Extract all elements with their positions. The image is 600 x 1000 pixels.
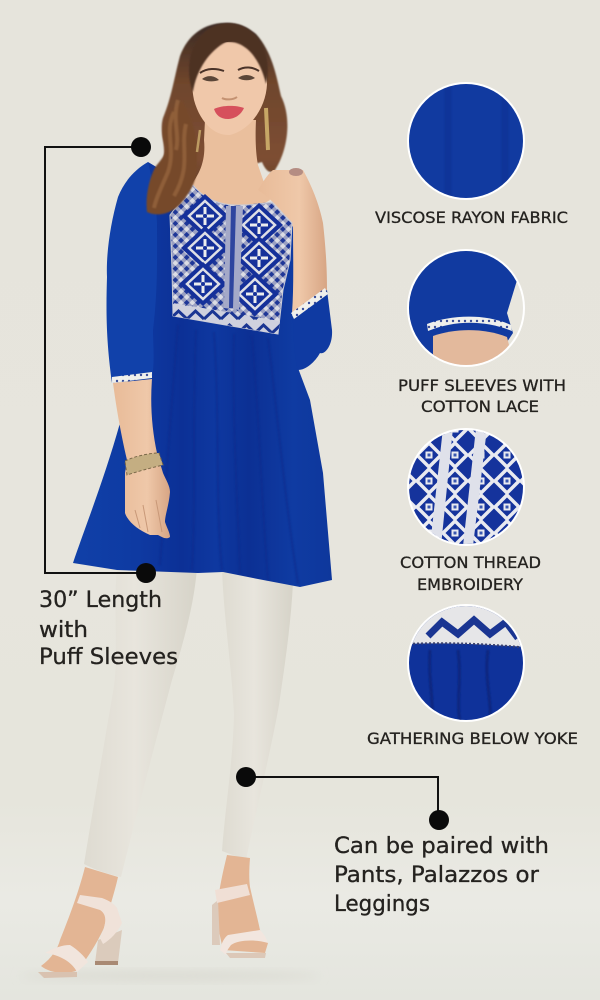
swatch bbox=[407, 249, 525, 367]
label: Can be paired with bbox=[334, 834, 549, 859]
neck and chest bbox=[186, 120, 270, 212]
face bbox=[192, 42, 267, 135]
leader line bbox=[246, 777, 438, 820]
leader line bbox=[45, 147, 146, 573]
panel: viscose rayon fabric bbox=[375, 82, 568, 227]
dot bbox=[136, 563, 156, 583]
dot bbox=[236, 767, 256, 787]
left cuff lace bbox=[112, 372, 152, 383]
callout: pairing bbox=[236, 767, 556, 917]
panel: puff sleeves bbox=[398, 248, 571, 416]
gathers bbox=[160, 325, 298, 584]
lips bbox=[214, 106, 244, 119]
hair front lock bbox=[147, 100, 197, 214]
swatch bbox=[407, 82, 525, 200]
floor shadow bbox=[20, 971, 320, 981]
embroidered yoke bbox=[170, 185, 292, 334]
bottom border bbox=[173, 303, 280, 334]
caption: GATHERING BELOW YOKE bbox=[367, 729, 578, 748]
eyes bbox=[202, 75, 255, 81]
label: Puff Sleeves bbox=[39, 645, 178, 670]
caption: COTTON LACE bbox=[421, 397, 539, 416]
motifs bbox=[181, 194, 229, 238]
caption: COTTON THREAD bbox=[400, 553, 541, 572]
right cuff lace bbox=[291, 288, 328, 319]
caption: EMBROIDERY bbox=[417, 575, 523, 594]
left foot bbox=[38, 867, 122, 978]
earrings bbox=[266, 108, 268, 150]
caption: PUFF SLEEVES WITH bbox=[398, 376, 566, 395]
swatch bbox=[407, 604, 525, 722]
sleeve left bbox=[107, 162, 157, 383]
panel: gathering below yoke bbox=[367, 603, 578, 748]
nose bbox=[222, 97, 237, 99]
right foot bbox=[212, 855, 268, 958]
panel: cotton thread embroidery bbox=[400, 425, 546, 594]
right forearm and hand bbox=[258, 170, 327, 313]
label: with bbox=[39, 618, 88, 643]
kurta body bbox=[73, 162, 332, 587]
sleeve right bbox=[292, 225, 332, 370]
model photo bbox=[20, 23, 332, 981]
caption: VISCOSE RAYON FABRIC bbox=[375, 208, 568, 227]
dot bbox=[429, 810, 449, 830]
callout: 30 inch length bbox=[39, 137, 178, 670]
dot bbox=[131, 137, 151, 157]
label: Pants, Palazzos or bbox=[334, 863, 540, 888]
hair highlights bbox=[154, 100, 186, 208]
bracelet bbox=[125, 453, 163, 475]
brows bbox=[200, 67, 259, 73]
center band bbox=[224, 206, 243, 310]
label: 30” Length bbox=[39, 588, 162, 613]
right legging bbox=[222, 570, 293, 860]
hair back bbox=[147, 23, 287, 215]
swatch bbox=[407, 428, 525, 546]
left forearm and hand bbox=[113, 379, 170, 538]
label: Leggings bbox=[334, 892, 430, 917]
hair front bbox=[189, 23, 268, 92]
left legging bbox=[84, 568, 197, 877]
ring bbox=[289, 168, 303, 176]
